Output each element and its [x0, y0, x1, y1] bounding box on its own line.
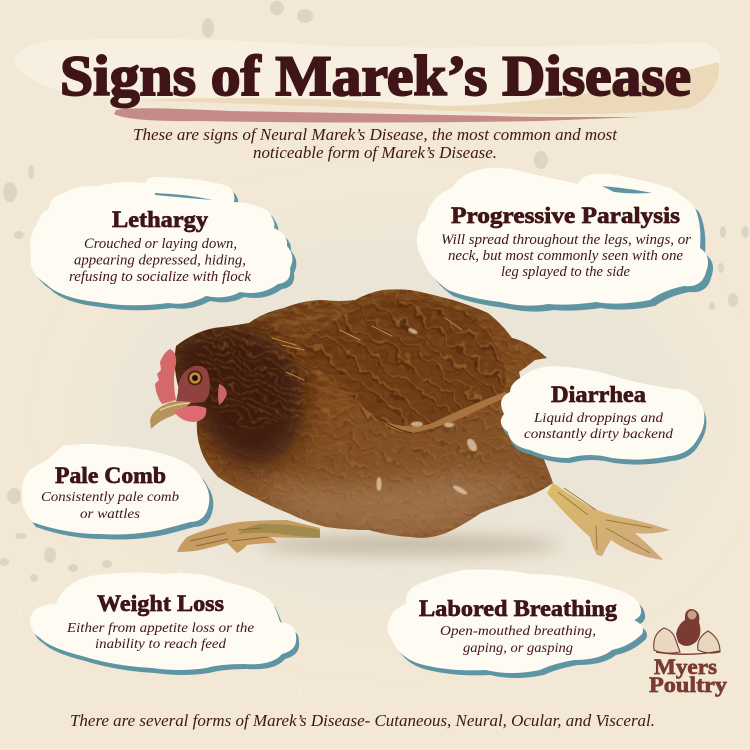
callout: Progressive Paralysis — [417, 168, 713, 312]
callout: Pale Comb — [22, 444, 213, 540]
subtitle: These are signs of Neural Marek’s Disease, the most common and most — [133, 125, 618, 144]
body — [174, 289, 553, 538]
wing edge — [380, 392, 510, 433]
callout: Labored Breathing — [388, 570, 647, 678]
wattle — [174, 406, 206, 422]
callout: Diarrhea — [501, 366, 706, 465]
callout: Progressive Paralysis: leg splayed to the side — [501, 264, 630, 280]
feathers — [272, 318, 462, 380]
callout: Pale Comb: or wattles — [80, 507, 141, 522]
wing — [300, 299, 506, 433]
callout: Weight Loss — [30, 572, 299, 675]
callout: Lethargy: appearing depressed, hiding, — [74, 252, 246, 268]
chicken illustration — [150, 265, 670, 565]
callout: Lethargy — [30, 177, 296, 310]
title brush background — [14, 39, 721, 122]
callout: Diarrhea: constantly dirty backend — [524, 427, 674, 442]
callout: Progressive Paralysis: Will spread throughout the legs, wings, or — [441, 232, 691, 248]
callout: Lethargy: Crouched or laying down, — [84, 236, 237, 252]
logo: Myers Poultry: Myers — [654, 654, 717, 679]
callout: Diarrhea: Liquid droppings and — [533, 411, 664, 426]
logo: Myers Poultry: Poultry — [649, 672, 727, 697]
logo: Myers Poultry — [649, 609, 727, 697]
callout: Progressive Paralysis: neck, but most commonly seen with one — [448, 248, 683, 264]
callout: Weight Loss: Weight Loss — [97, 591, 224, 616]
callout: Lethargy: refusing to socialize with flock — [69, 269, 251, 285]
callout: Labored Breathing: Open-mouthed breathing, — [440, 624, 596, 639]
title: Signs of Marek’s Disease — [60, 45, 691, 108]
callout: Pale Comb: Consistently pale comb — [41, 490, 179, 505]
callout: Pale Comb: Pale Comb — [55, 463, 166, 488]
beak — [150, 401, 191, 429]
footer note: There are several forms of Marek’s Disease- Cutaneous, Neural, Ocular, and Visceral. — [70, 711, 655, 730]
icon: chick in eggshell — [654, 609, 720, 654]
neck hackles — [195, 326, 313, 429]
comb — [155, 349, 176, 404]
subtitle — [133, 125, 618, 162]
dark neck shading — [170, 325, 305, 466]
callout: Weight Loss: inability to reach feed — [95, 637, 227, 652]
callout: Labored Breathing: gaping, or gasping — [463, 641, 573, 656]
subtitle: noticeable form of Marek’s Disease. — [253, 143, 497, 162]
pale feather patches — [376, 327, 479, 496]
callout: Weight Loss: Either from appetite loss or the — [66, 621, 254, 636]
callout: Diarrhea: Diarrhea — [551, 382, 647, 407]
face skin — [176, 366, 210, 403]
callout: Progressive Paralysis: Progressive Paralysis — [451, 203, 680, 228]
lower breast highlight — [250, 475, 530, 533]
callout: Labored Breathing: Labored Breathing — [419, 596, 618, 621]
right leg and foot — [547, 483, 670, 560]
left leg and foot — [177, 520, 320, 553]
callout: Lethargy: Lethargy — [112, 207, 209, 232]
eye — [188, 370, 202, 386]
